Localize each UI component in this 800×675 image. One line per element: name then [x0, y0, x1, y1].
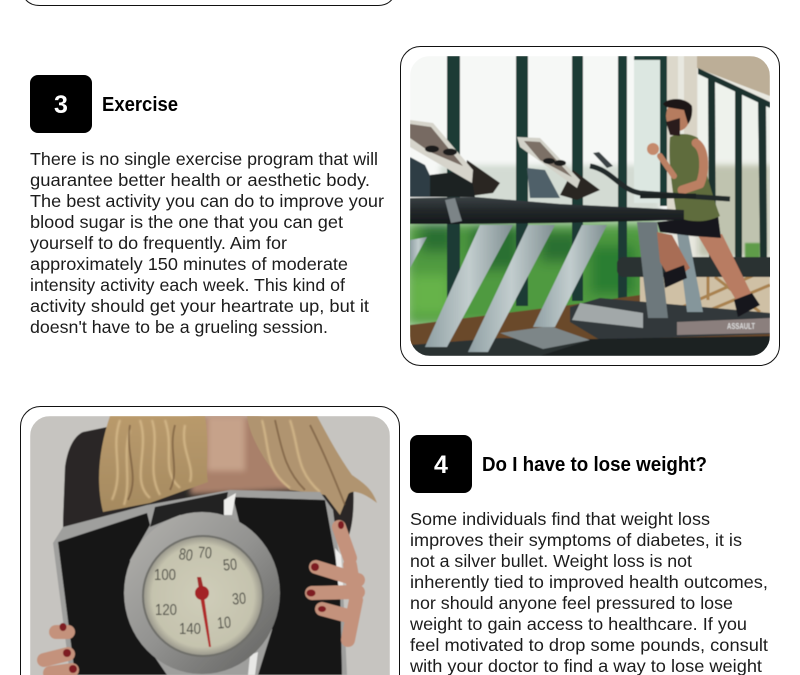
- panel: previous card bottom edge: [20, 0, 398, 6]
- text block: exercise advice: guarantee better health or aesthetic body.: [30, 170, 370, 190]
- dial: 140: [179, 621, 201, 638]
- photo: man running on treadmill: ASSAULT: [727, 322, 755, 331]
- text block: exercise advice: blood sugar is the one that you can get: [30, 212, 343, 232]
- text block: exercise advice: The best activity you can do to improve your: [30, 191, 384, 211]
- posts: [410, 225, 607, 352]
- dial: 10: [216, 614, 232, 633]
- dial: 120: [155, 602, 177, 619]
- console 1: [463, 160, 500, 197]
- window frames: [447, 56, 667, 306]
- text block: exercise advice: activity should get your heartrate up, but it: [30, 296, 369, 316]
- dial: 50: [222, 556, 238, 575]
- number badge 4: [410, 435, 472, 493]
- number badge 3: [30, 75, 92, 133]
- scale body: [53, 490, 347, 675]
- back wall and right windows: [667, 56, 770, 266]
- text block: exercise advice: doesn't have to be a grueling session.: [30, 317, 328, 337]
- hands: [44, 527, 358, 673]
- text block: exercise advice: [30, 149, 384, 337]
- panel: exercise text section: [30, 75, 384, 337]
- text block: exercise advice: intensity activity each week. This kind of: [30, 275, 345, 295]
- number badge 3: 3: [54, 91, 68, 119]
- runner legs: [656, 232, 690, 272]
- floor: [410, 294, 770, 346]
- head: [665, 106, 688, 132]
- text block: weight advice: weight to gain access to healthcare. If you: [409, 614, 747, 634]
- uprights: [637, 222, 668, 318]
- bench: [617, 257, 777, 277]
- text block: exercise advice: yourself to do frequently. Aim for: [30, 233, 287, 253]
- heading: Exercise: Exercise: [102, 94, 178, 116]
- far arm: [660, 156, 674, 176]
- torso: [669, 134, 720, 221]
- black shirt: [63, 426, 354, 540]
- text block: weight advice: Some individuals find that weight loss: [410, 509, 710, 529]
- number badge 4: 4: [434, 451, 448, 479]
- near arm: [682, 143, 704, 190]
- photo: man running on treadmill: [405, 56, 777, 356]
- console 2: [560, 170, 600, 200]
- dial: 30: [231, 590, 247, 609]
- text block: weight advice: nor should anyone feel pressured to lose: [410, 593, 733, 613]
- text block: weight advice: feel motivated to drop some pounds, consult: [410, 635, 768, 655]
- dial: 100: [154, 567, 176, 584]
- dial: 80: [178, 546, 194, 565]
- panel: treadmill photo card: [400, 46, 780, 366]
- dial: 70: [197, 545, 212, 562]
- text block: weight advice: not a silver bullet. Weight loss is not: [410, 551, 692, 571]
- shorts: [657, 215, 721, 238]
- panel: scale photo card: [20, 406, 400, 675]
- treadmill deck: [570, 298, 770, 340]
- heading: Do I have to lose weight?: Do I have to lose weight?: [482, 454, 707, 476]
- text block: weight advice: inherently tied to improved health outcomes,: [410, 572, 768, 592]
- main crossbar: [410, 197, 684, 224]
- text block: weight advice: improves their symptoms of diabetes, it is: [410, 530, 742, 550]
- text block: exercise advice: There is no single exercise program that will: [30, 149, 378, 169]
- blond hair: [99, 416, 208, 512]
- neck and skin: [190, 416, 295, 495]
- text block: weight advice: [409, 509, 768, 675]
- text block: exercise advice: approximately 150 minutes of moderate: [30, 254, 348, 274]
- panel: weight text section: [409, 435, 768, 675]
- dial: [124, 512, 280, 674]
- photo: woman holding weight scale: [30, 416, 390, 675]
- handle: [590, 166, 730, 199]
